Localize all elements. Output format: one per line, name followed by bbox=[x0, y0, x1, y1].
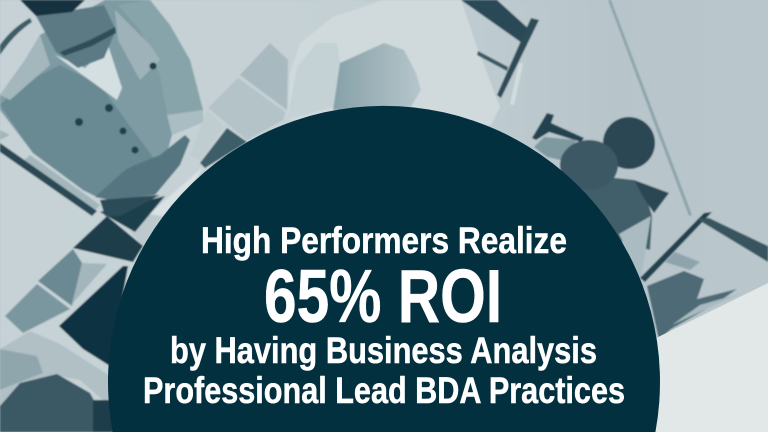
light corner panel bbox=[650, 283, 768, 432]
heading line 3: by Having Business Analysis bbox=[170, 330, 597, 371]
photo: woman with curly hair bbox=[532, 113, 669, 250]
photo: man in denim jacket bbox=[0, 0, 203, 216]
photo: man in white shirt bbox=[287, 0, 500, 125]
photo: chair behind white shirt bbox=[461, 0, 539, 105]
heading line 4: Professional Lead BDA Practices bbox=[143, 370, 625, 411]
photo: lower-left person bbox=[0, 331, 115, 432]
headline text bbox=[143, 220, 625, 411]
big statistic: 65% ROI: 65% ROI bbox=[264, 254, 502, 338]
photo: right chair and seated person bbox=[608, 0, 768, 340]
dark semicircle panel bbox=[108, 106, 660, 432]
heading line 1: High Performers Realize bbox=[201, 220, 567, 261]
photo: table tiles bbox=[5, 43, 288, 366]
